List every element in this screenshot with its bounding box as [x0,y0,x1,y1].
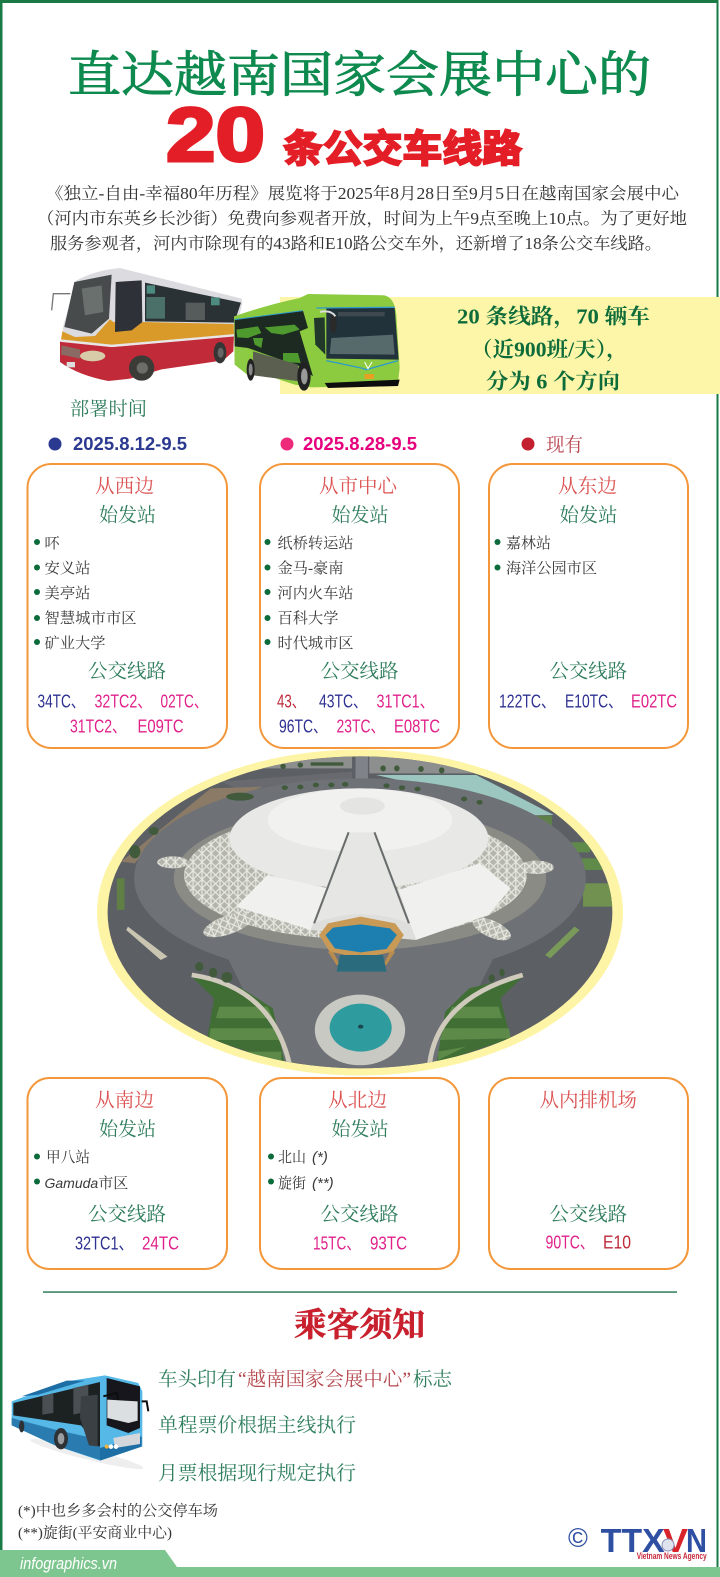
panel: from the north: (**) [312,1175,334,1192]
legend: 现有 [546,434,583,456]
icon: red and yellow bus [52,268,242,381]
notice items: 车头印有 [158,1368,236,1390]
panel: from the east: E02TC [631,690,677,712]
panel: from the west: 32TC2、 [94,690,152,712]
intro paragraph [37,183,687,253]
panel: from the south: 从南边 [95,1090,154,1112]
panel: from the city centre: 43TC、 [319,690,367,712]
intro paragraph: （河内市东英乡长沙街）免费向参观者开放，时间为上午9点至晚上10点。为了更好地 [37,209,687,228]
panel: from the east: 122TC、 [499,690,555,712]
panel: from the north: 公交线路 [320,1204,398,1226]
logo: TTXVN Vietnam News Agency [568,1522,707,1561]
notice items: 月票根据现行规定执行 [158,1462,356,1484]
panel: from Noi Bai airport [489,1078,688,1269]
legend: 2025.8.12-9.5 [73,434,187,454]
legend: 2025.8.28-9.5 [303,434,417,454]
heading: passenger notice: 乘客须知 [294,1307,425,1344]
panel: from the west: 34TC、 [38,690,84,712]
panel: from the west: 矿业大学 [44,635,106,652]
panel: from the west: 吥 [44,535,60,552]
panel: from the south: 甲八站 [46,1149,90,1166]
panel: from the east: 嘉林站 [506,535,551,552]
panel: from Noi Bai airport: 公交线路 [550,1204,627,1226]
footnotes: (**)旋街(平安商业中心) [18,1524,172,1542]
panel: from the south: 公交线路 [88,1204,166,1226]
panel: from the city centre: 96TC、 [279,716,327,736]
panel: from the city centre: 百科大学 [278,610,338,627]
panel: from the city centre: 公交线路 [320,660,398,682]
notice items: “越南国家会展中心” [238,1368,411,1390]
panel: from the north: 旋街 [278,1175,306,1192]
panel: from the city centre: 从市中心 [319,476,398,498]
panel: from the city centre: 始发站 [332,504,388,526]
panel: from the city centre: 31TC1、 [376,690,434,712]
panel: from the west [28,464,227,748]
panel: from the city centre: 43、 [277,690,305,712]
panel: from the city centre: 纸桥转运站 [278,534,354,552]
panel: from the west: 从西边 [95,476,154,498]
panel: from the north: 93TC [370,1232,407,1254]
intro paragraph: 服务参观者，河内市除现有的43路和E10路公交车外，还新增了18条公交车线路。 [50,234,662,253]
panel: from the north [260,1078,459,1269]
panel: from the east: 公交线路 [550,660,627,682]
footer bar: infographics.vn [20,1554,117,1573]
photo: aerial view of the exhibition centre [90,745,631,1076]
panel: from the west: 智慧城市市区 [44,609,136,627]
panel: from the east: E10TC、 [565,690,622,712]
panel: from the city centre: 金马-豪南 [278,560,344,577]
callout: fleet summary: 分为 6 个方向 [486,370,620,394]
notice items: 标志 [413,1368,452,1390]
panel: from Noi Bai airport: 从内排机场 [540,1090,637,1112]
panel: from the south: Gamuda市区 [44,1175,128,1192]
panel: from the city centre: 23TC、 [336,716,384,736]
title number: 20 routes: 条公交车线路 [283,129,522,171]
panel: from the south [28,1078,227,1269]
footer bar [0,1550,720,1577]
panel: from the east: 始发站 [560,504,618,526]
callout: fleet summary: （近900班/天）， [471,338,628,362]
panel: from the south: 24TC [142,1232,179,1254]
yellow highlight band [280,297,720,394]
logo: TTXVN Vietnam News Agency: V [663,1522,688,1559]
footnotes [18,1502,218,1542]
deployment time label: 部署时间 [70,398,147,420]
panel: from the city centre: 时代城市区 [278,635,354,652]
panel: from the west: 始发站 [99,504,156,526]
footnotes: (*)中也乡多会村的公交停车场 [18,1502,218,1520]
panel: from the west: 31TC2、 [70,716,126,736]
panel: from the west: 公交线路 [88,660,166,682]
notice items [158,1368,452,1484]
panel: from the city centre: E08TC [394,716,440,736]
title: 直达越南国家会展中心的 [68,48,651,102]
title number: 20 routes: 20 [166,93,265,178]
logo: TTXVN Vietnam News Agency: N [686,1522,707,1559]
logo: TTXVN Vietnam News Agency: TTX [601,1522,665,1559]
panel: from the east: 从东边 [558,476,617,498]
panel: from the west: 02TC、 [160,690,208,712]
panel: from the city centre: 河内火车站 [278,585,354,602]
panel: from the north: 北山 [278,1149,306,1166]
panel: from the city centre [260,464,459,748]
panel: from the east [489,464,688,748]
title number: 20 routes [166,93,522,178]
panel: from the south: 始发站 [99,1118,156,1140]
panel: from the north: 15TC、 [313,1232,360,1254]
panel: from the south: 32TC1、 [75,1232,133,1254]
panel: from the north: 始发站 [332,1118,388,1140]
intro paragraph: 《独立-自由-幸福80年历程》展览将于2025年8月28日至9月5日在越南国家会展中心 [46,183,680,203]
panel: from the north: (*) [312,1149,328,1166]
panel: from the west: E09TC [138,716,184,736]
panel: from the east: 海洋公园市区 [506,560,597,577]
icon: blue bus [12,1375,148,1473]
panel: from Noi Bai airport: 90TC、 [546,1232,594,1252]
panel: from Noi Bai airport: E10 [603,1232,631,1252]
logo: TTXVN Vietnam News Agency: © [568,1523,588,1553]
panel: from the west: 安义站 [44,560,90,577]
legend [48,434,583,456]
callout: fleet summary: 20 条线路，70 辆车 [457,304,650,330]
notice items: 单程票价根据主线执行 [158,1414,356,1436]
callout: fleet summary [457,304,650,394]
panel: from the north: 从北边 [328,1090,387,1112]
panel: from the west: 美亭站 [44,585,90,602]
icon: green electric bus [234,294,400,391]
